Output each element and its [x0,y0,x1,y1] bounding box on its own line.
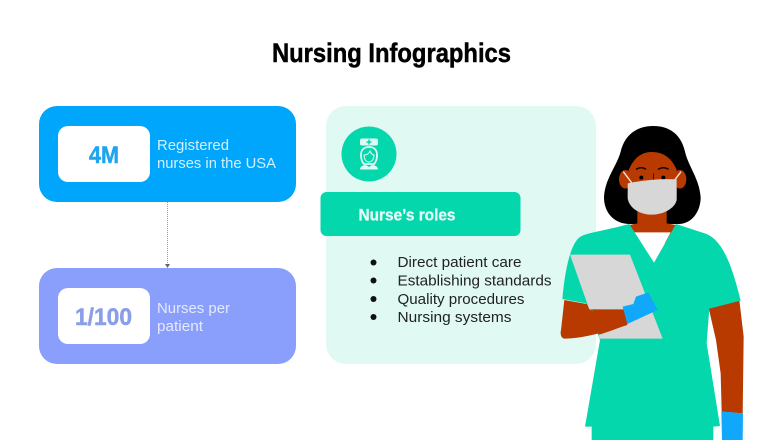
left arm (viewer's right) [708,300,744,413]
neck [629,210,676,243]
panel: nurse's roles [320,106,596,364]
scrubs [562,224,741,440]
glove [623,292,658,324]
undershirt [634,232,671,263]
stat: 1/100: 1/100 [75,304,132,331]
second glove [721,411,743,440]
list: roles: Quality procedures [398,292,524,308]
title: Nursing Infographics [272,38,511,68]
panel: registered nurses [39,106,296,202]
list: roles: Nursing systems [398,310,512,326]
illustration: nurse [561,126,744,440]
text: registered nurses in the USA: nurses in the USA [157,156,276,172]
stat: 4M: 4M [89,142,119,169]
list: roles: Direct patient care [398,255,522,271]
face [629,152,677,215]
text: nurses per patient: Nurses per [157,301,230,317]
panel: nurses per patient [39,268,296,364]
arrow: dotted connector [165,202,170,268]
eyes [639,176,643,180]
clipboard [570,255,663,339]
heading bar [320,192,520,236]
ears [619,170,632,189]
list: roles [370,255,552,326]
heading bar: Nurse’s roles [358,206,456,224]
icon: nurse [342,126,396,182]
mask [623,172,681,183]
text: registered nurses in the USA: Registered [157,138,229,154]
right arm [561,300,627,339]
list: roles: Establishing standards [398,274,552,290]
hair [604,126,701,224]
text: nurses per patient: patient [157,319,203,335]
